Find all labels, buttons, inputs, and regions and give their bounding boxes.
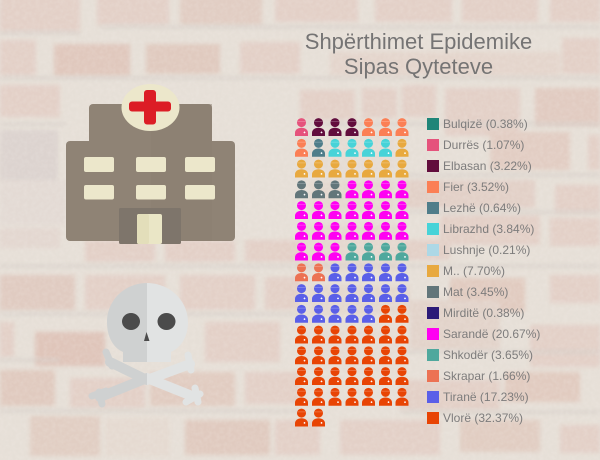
legend: Mat: Mat (3.45%) — [443, 285, 508, 299]
row 7 — [295, 243, 408, 260]
red cross — [129, 90, 171, 124]
legend: Elbasan: Elbasan (3.22%) — [443, 159, 532, 173]
row 10 — [295, 305, 408, 323]
crossbones — [92, 352, 200, 404]
row 11 — [295, 326, 408, 344]
legend: Vlorë: Vlorë (32.37%) — [443, 411, 523, 425]
row 9 — [295, 284, 408, 302]
row 3 — [295, 160, 408, 178]
legend: Tiranë: Tiranë (17.23%) — [443, 390, 529, 404]
row 14 — [295, 388, 408, 406]
legend: Librazhd: Librazhd (3.84%) — [443, 222, 534, 236]
legend: Skrapar: Skrapar (1.66%) — [443, 369, 530, 383]
nose — [144, 332, 150, 341]
legend: Lushnje: Lushnje (0.21%) — [443, 243, 530, 257]
cranium — [107, 283, 147, 362]
row 12 — [295, 346, 408, 364]
row 13 — [295, 367, 408, 385]
title — [305, 29, 532, 79]
title: Shpërthimet Epidemike — [305, 29, 532, 54]
legend: Lezhë: Lezhë (0.64%) — [443, 201, 521, 215]
legend: M..: M.. (7.70%) — [443, 264, 505, 278]
title: Sipas Qyteteve — [344, 54, 493, 79]
eye sockets — [122, 313, 140, 330]
icon: hospital — [66, 84, 235, 244]
hospital door — [137, 214, 162, 244]
row 6 — [295, 222, 408, 240]
legend: Bulqizë: Bulqizë (0.38%) — [443, 117, 528, 131]
hospital windows — [84, 157, 215, 200]
row 5 — [295, 201, 408, 219]
legend: Shkodër: Shkodër (3.65%) — [443, 348, 533, 362]
row 8 — [295, 263, 408, 281]
pictogram chart — [295, 118, 408, 426]
legend — [427, 117, 540, 425]
row 15 — [295, 409, 325, 426]
row 2 — [295, 139, 408, 157]
legend: Durrës: Durrës (1.07%) — [443, 138, 524, 152]
row 4 — [295, 180, 408, 198]
legend: Fier: Fier (3.52%) — [443, 180, 509, 194]
icon: skull and crossbones — [92, 283, 200, 404]
row 1 — [295, 118, 408, 136]
legend: Mirditë: Mirditë (0.38%) — [443, 306, 524, 320]
legend: Sarandë: Sarandë (20.67%) — [443, 327, 540, 341]
